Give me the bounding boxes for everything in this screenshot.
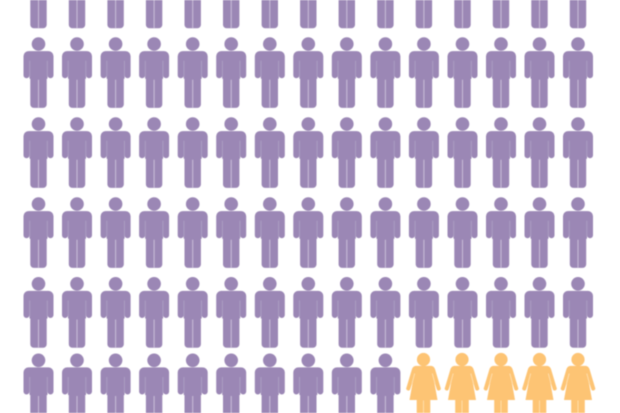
row 2: men bbox=[24, 37, 593, 108]
row 5: men bbox=[24, 277, 593, 348]
row 6: five women in orange bbox=[406, 353, 595, 413]
row 4: men bbox=[24, 197, 593, 268]
row 3: men bbox=[24, 117, 593, 188]
row 1: men, cropped at top bbox=[24, 0, 593, 28]
row 6: ten men bbox=[24, 354, 400, 413]
